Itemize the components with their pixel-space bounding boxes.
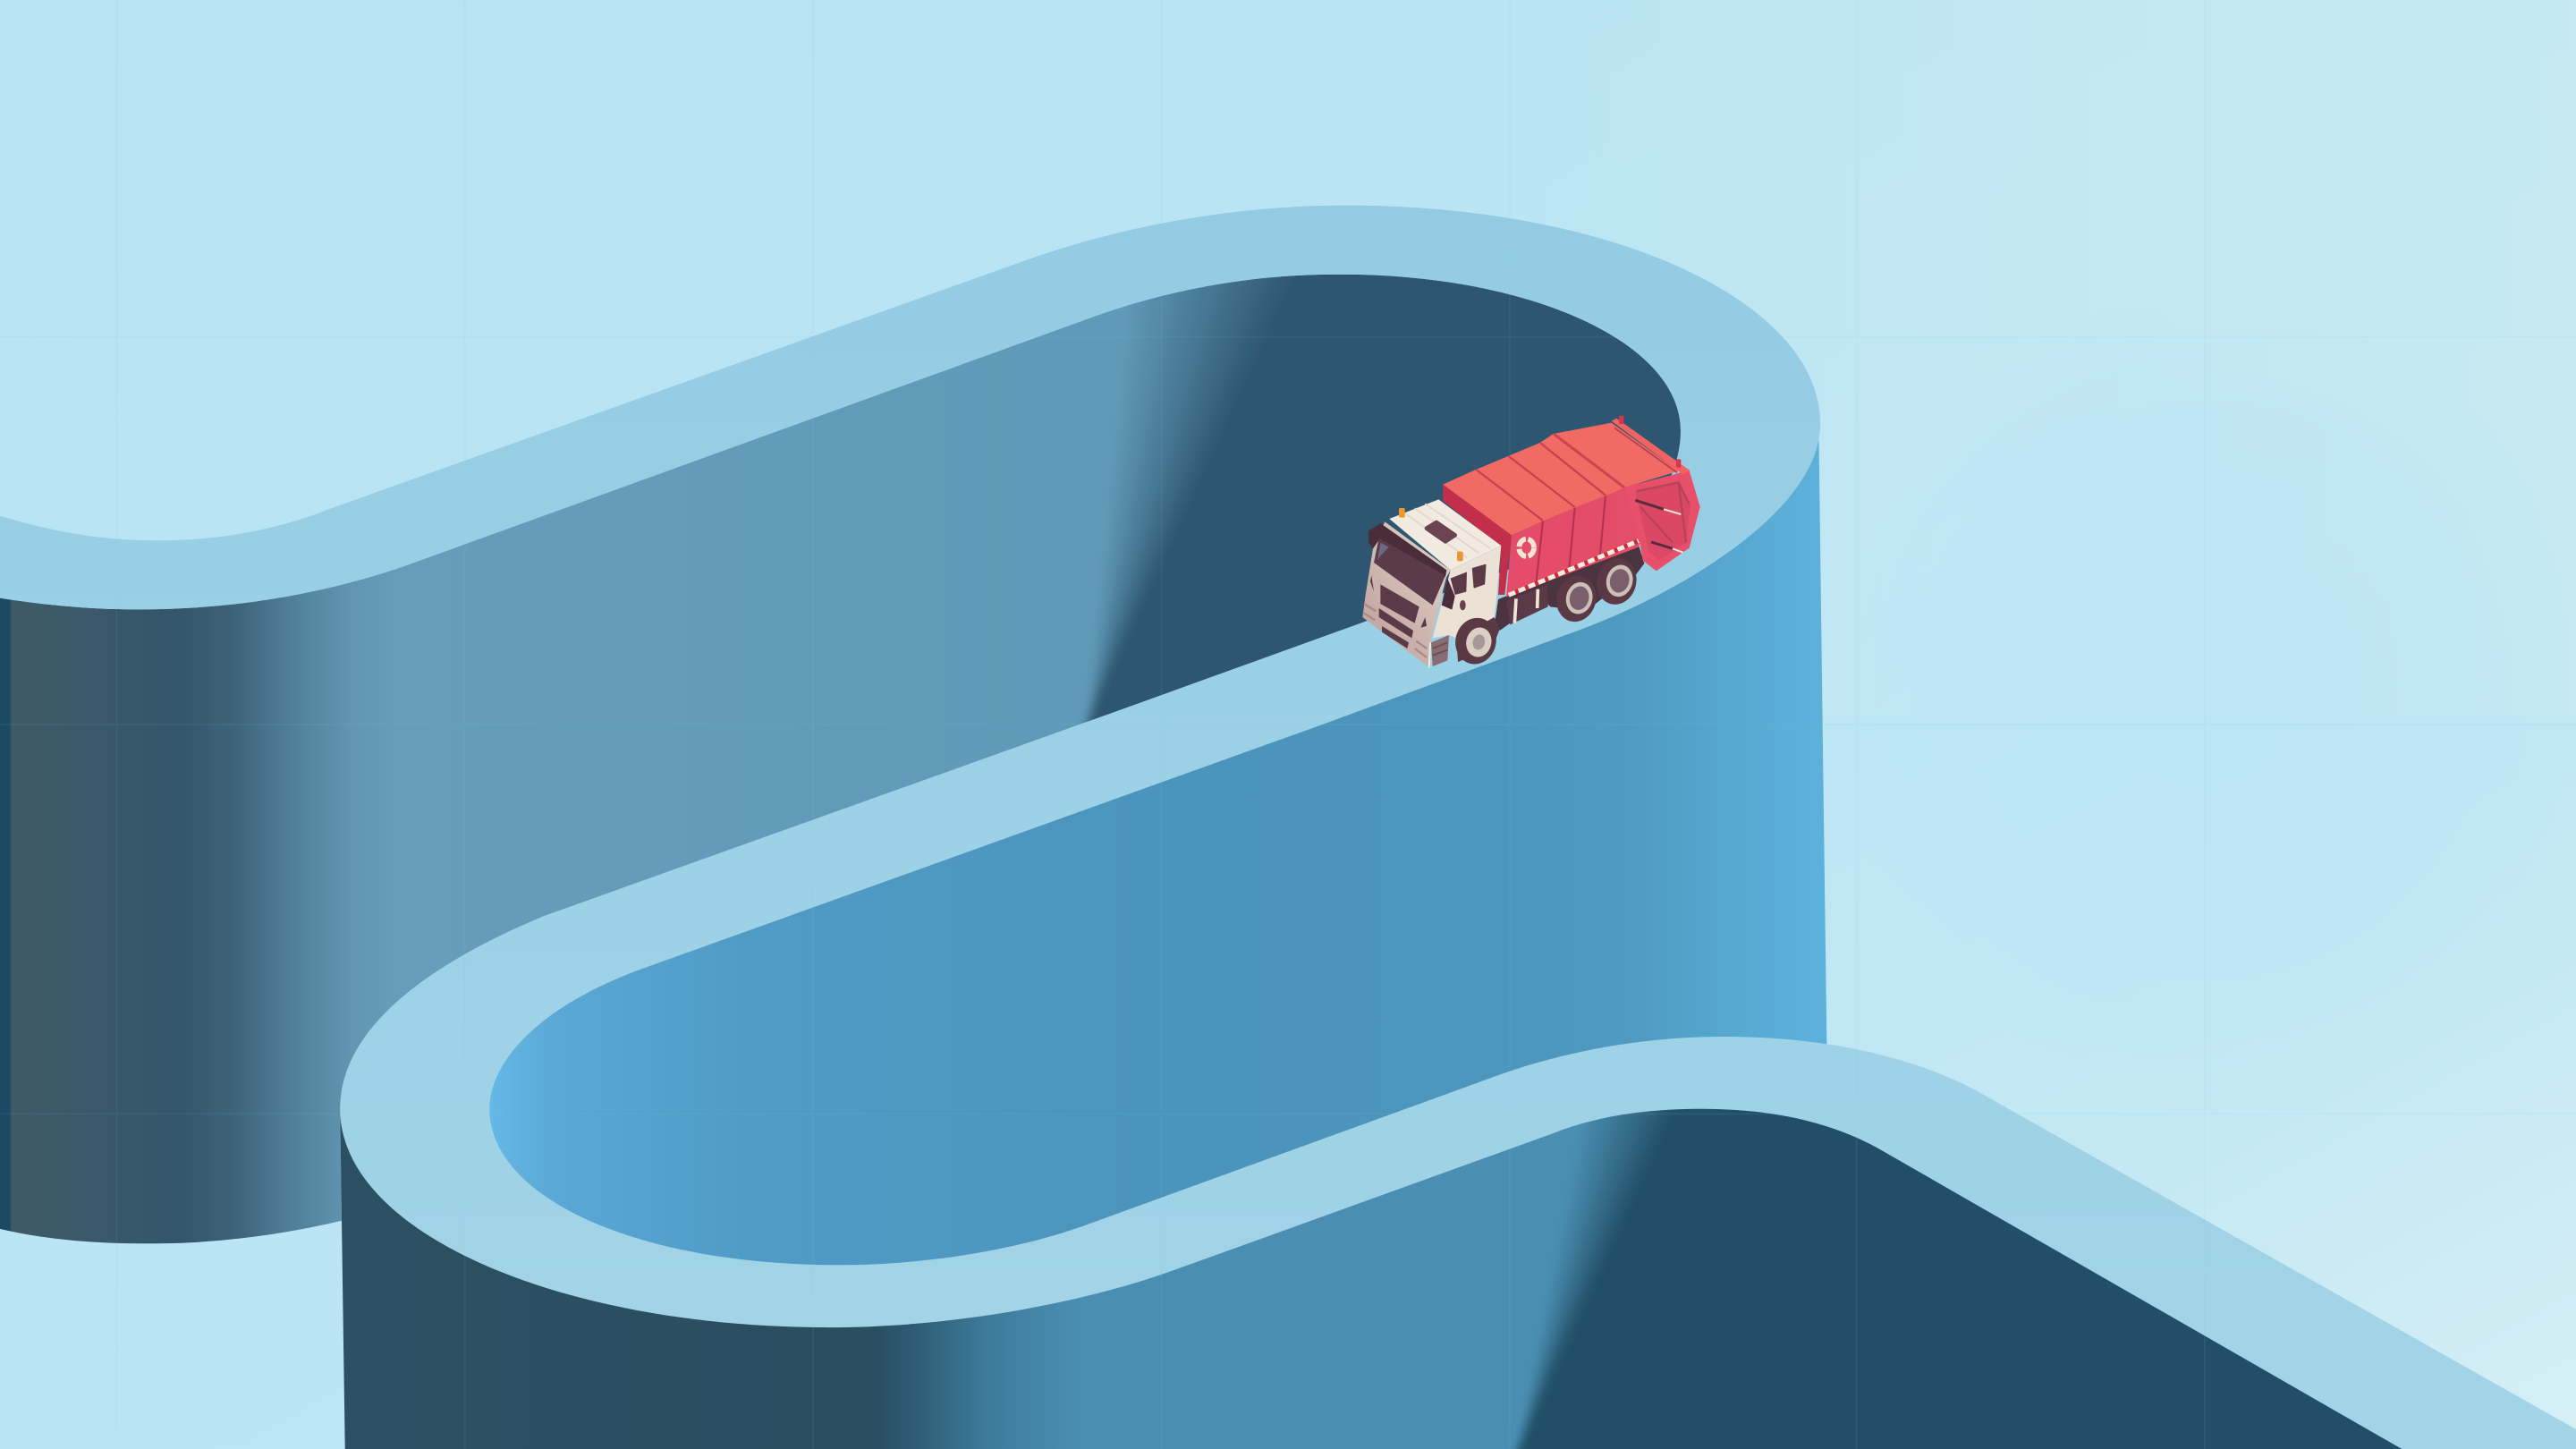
roof ribs — [1477, 443, 1606, 521]
bumper slats — [1363, 604, 1427, 657]
wing mirror — [1442, 579, 1455, 610]
compactor side panels — [1506, 487, 1640, 597]
icon: recycling garbage truck — [1362, 416, 1700, 668]
fuel tank with straps — [1506, 585, 1548, 624]
rear lip with pegs — [1612, 416, 1690, 475]
upper wall: shaded cliff behind the road — [0, 263, 1807, 1249]
grille — [1370, 575, 1427, 648]
windscreen — [1374, 538, 1445, 606]
truck chassis — [1496, 544, 1644, 631]
hazard stripe — [1509, 541, 1639, 595]
amber beacons — [1399, 508, 1463, 561]
hopper inner recess — [1635, 481, 1690, 561]
lower wall: shaded cliff in the foreground — [340, 1109, 2402, 1449]
front wheel — [1451, 614, 1501, 668]
headlight housing — [1429, 635, 1449, 668]
middle wall: blue inner face of the loop — [487, 424, 1826, 1275]
cab side — [1433, 546, 1501, 638]
cab door windows — [1451, 565, 1486, 610]
sun visor — [1368, 523, 1446, 577]
panel ribs — [1536, 496, 1606, 584]
compactor roof — [1443, 423, 1679, 535]
compactor front face — [1443, 485, 1512, 595]
windscreen reflection — [1377, 543, 1389, 561]
rear wheels — [1552, 554, 1641, 626]
cab roof — [1389, 499, 1501, 570]
cab front face — [1362, 521, 1451, 668]
hopper frame — [1636, 482, 1689, 543]
roof hatch — [1427, 522, 1455, 541]
roof grooves — [1404, 504, 1491, 557]
rear hopper — [1623, 470, 1700, 571]
hydraulic rams — [1635, 500, 1683, 553]
recycling symbol — [1519, 539, 1534, 556]
